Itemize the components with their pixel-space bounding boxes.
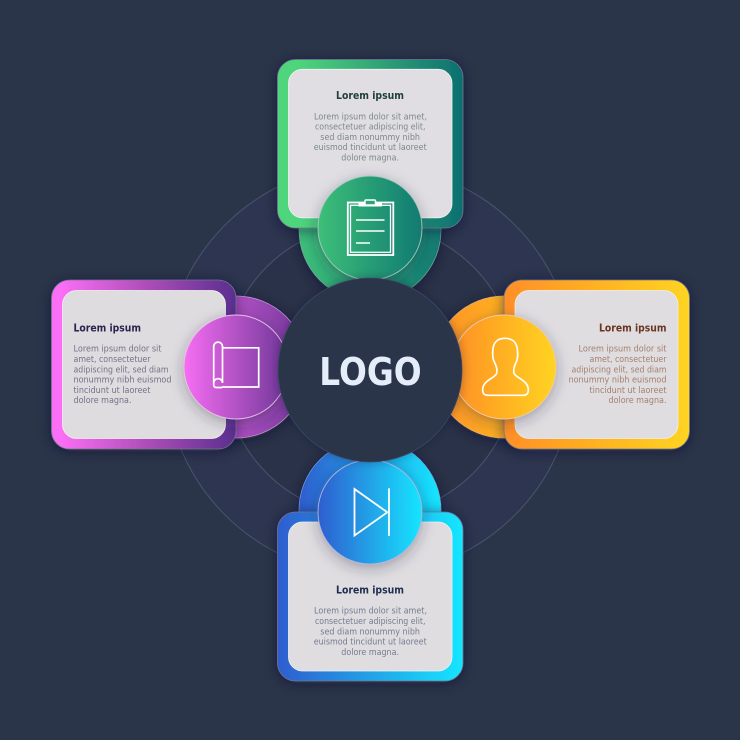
right arc backing [433,296,575,438]
right card frame [504,280,690,449]
panel: left purple [52,280,307,449]
left text block: nonummy nibh euismod [74,376,172,386]
bottom card frame [278,512,463,681]
icon: person [483,338,528,395]
top arc backing [299,159,441,301]
left heading: Lorem ipsum [74,322,141,334]
icon: clipboard [348,200,393,255]
right circle [452,315,556,419]
top text block [314,112,427,164]
bottom text block: euismod tincidunt ut laoreet [314,638,427,648]
bottom circle [318,460,422,564]
panel: bottom blue [278,439,463,681]
logo text: LOGO [319,350,422,394]
top text block: Lorem ipsum dolor sit amet, [314,112,427,122]
bottom text block: Lorem ipsum dolor sit amet, [314,607,427,617]
left card frame [52,280,236,449]
top text block: euismod tincidunt ut laoreet [314,143,427,153]
top heading: Lorem ipsum [336,90,404,102]
top text block: consectetuer adipiscing elit, [315,123,426,133]
bottom text block: dolore magna. [341,648,399,658]
right text block: nonummy nibh euismod [568,376,666,386]
icon: skip forward [354,488,389,536]
panel: top green [278,60,463,301]
top card body [288,69,452,218]
left text block: Lorem ipsum dolor sit [74,345,162,355]
top text block: sed diam nonummy nibh [320,133,420,143]
right text block: dolore magna. [608,396,666,406]
left card body [62,290,226,438]
top circle [318,176,422,280]
top card frame [278,60,463,228]
left text block: adipiscing elit, sed diam [74,365,168,375]
left text block [74,345,172,406]
logo circle [278,278,462,462]
icon: scroll [214,342,259,388]
left text block: amet, consectetuer [74,355,151,365]
concentric rings [165,165,575,575]
bottom card body [288,522,452,671]
left circle [184,315,288,419]
bottom text block: sed diam nonummy nibh [320,627,420,637]
top text block: dolore magna. [341,154,399,164]
bottom text block: consectetuer adipiscing elit, [315,617,426,627]
bottom heading: Lorem ipsum [336,584,404,596]
left text block: dolore magna. [74,396,132,406]
left arc backing [165,296,307,438]
right card body [515,290,678,438]
right text block: tincidunt ut laoreet [590,386,667,396]
right text block: adipiscing elit, sed diam [572,365,666,375]
bottom arc backing [299,439,441,581]
panel: right orange [433,280,690,449]
right text block [568,345,667,406]
right text block: amet, consectetuer [590,355,667,365]
bottom text block [314,607,427,658]
left text block: tincidunt ut laoreet [74,386,151,396]
right text block: Lorem ipsum dolor sit [578,345,667,355]
right heading: Lorem ipsum [599,322,667,334]
